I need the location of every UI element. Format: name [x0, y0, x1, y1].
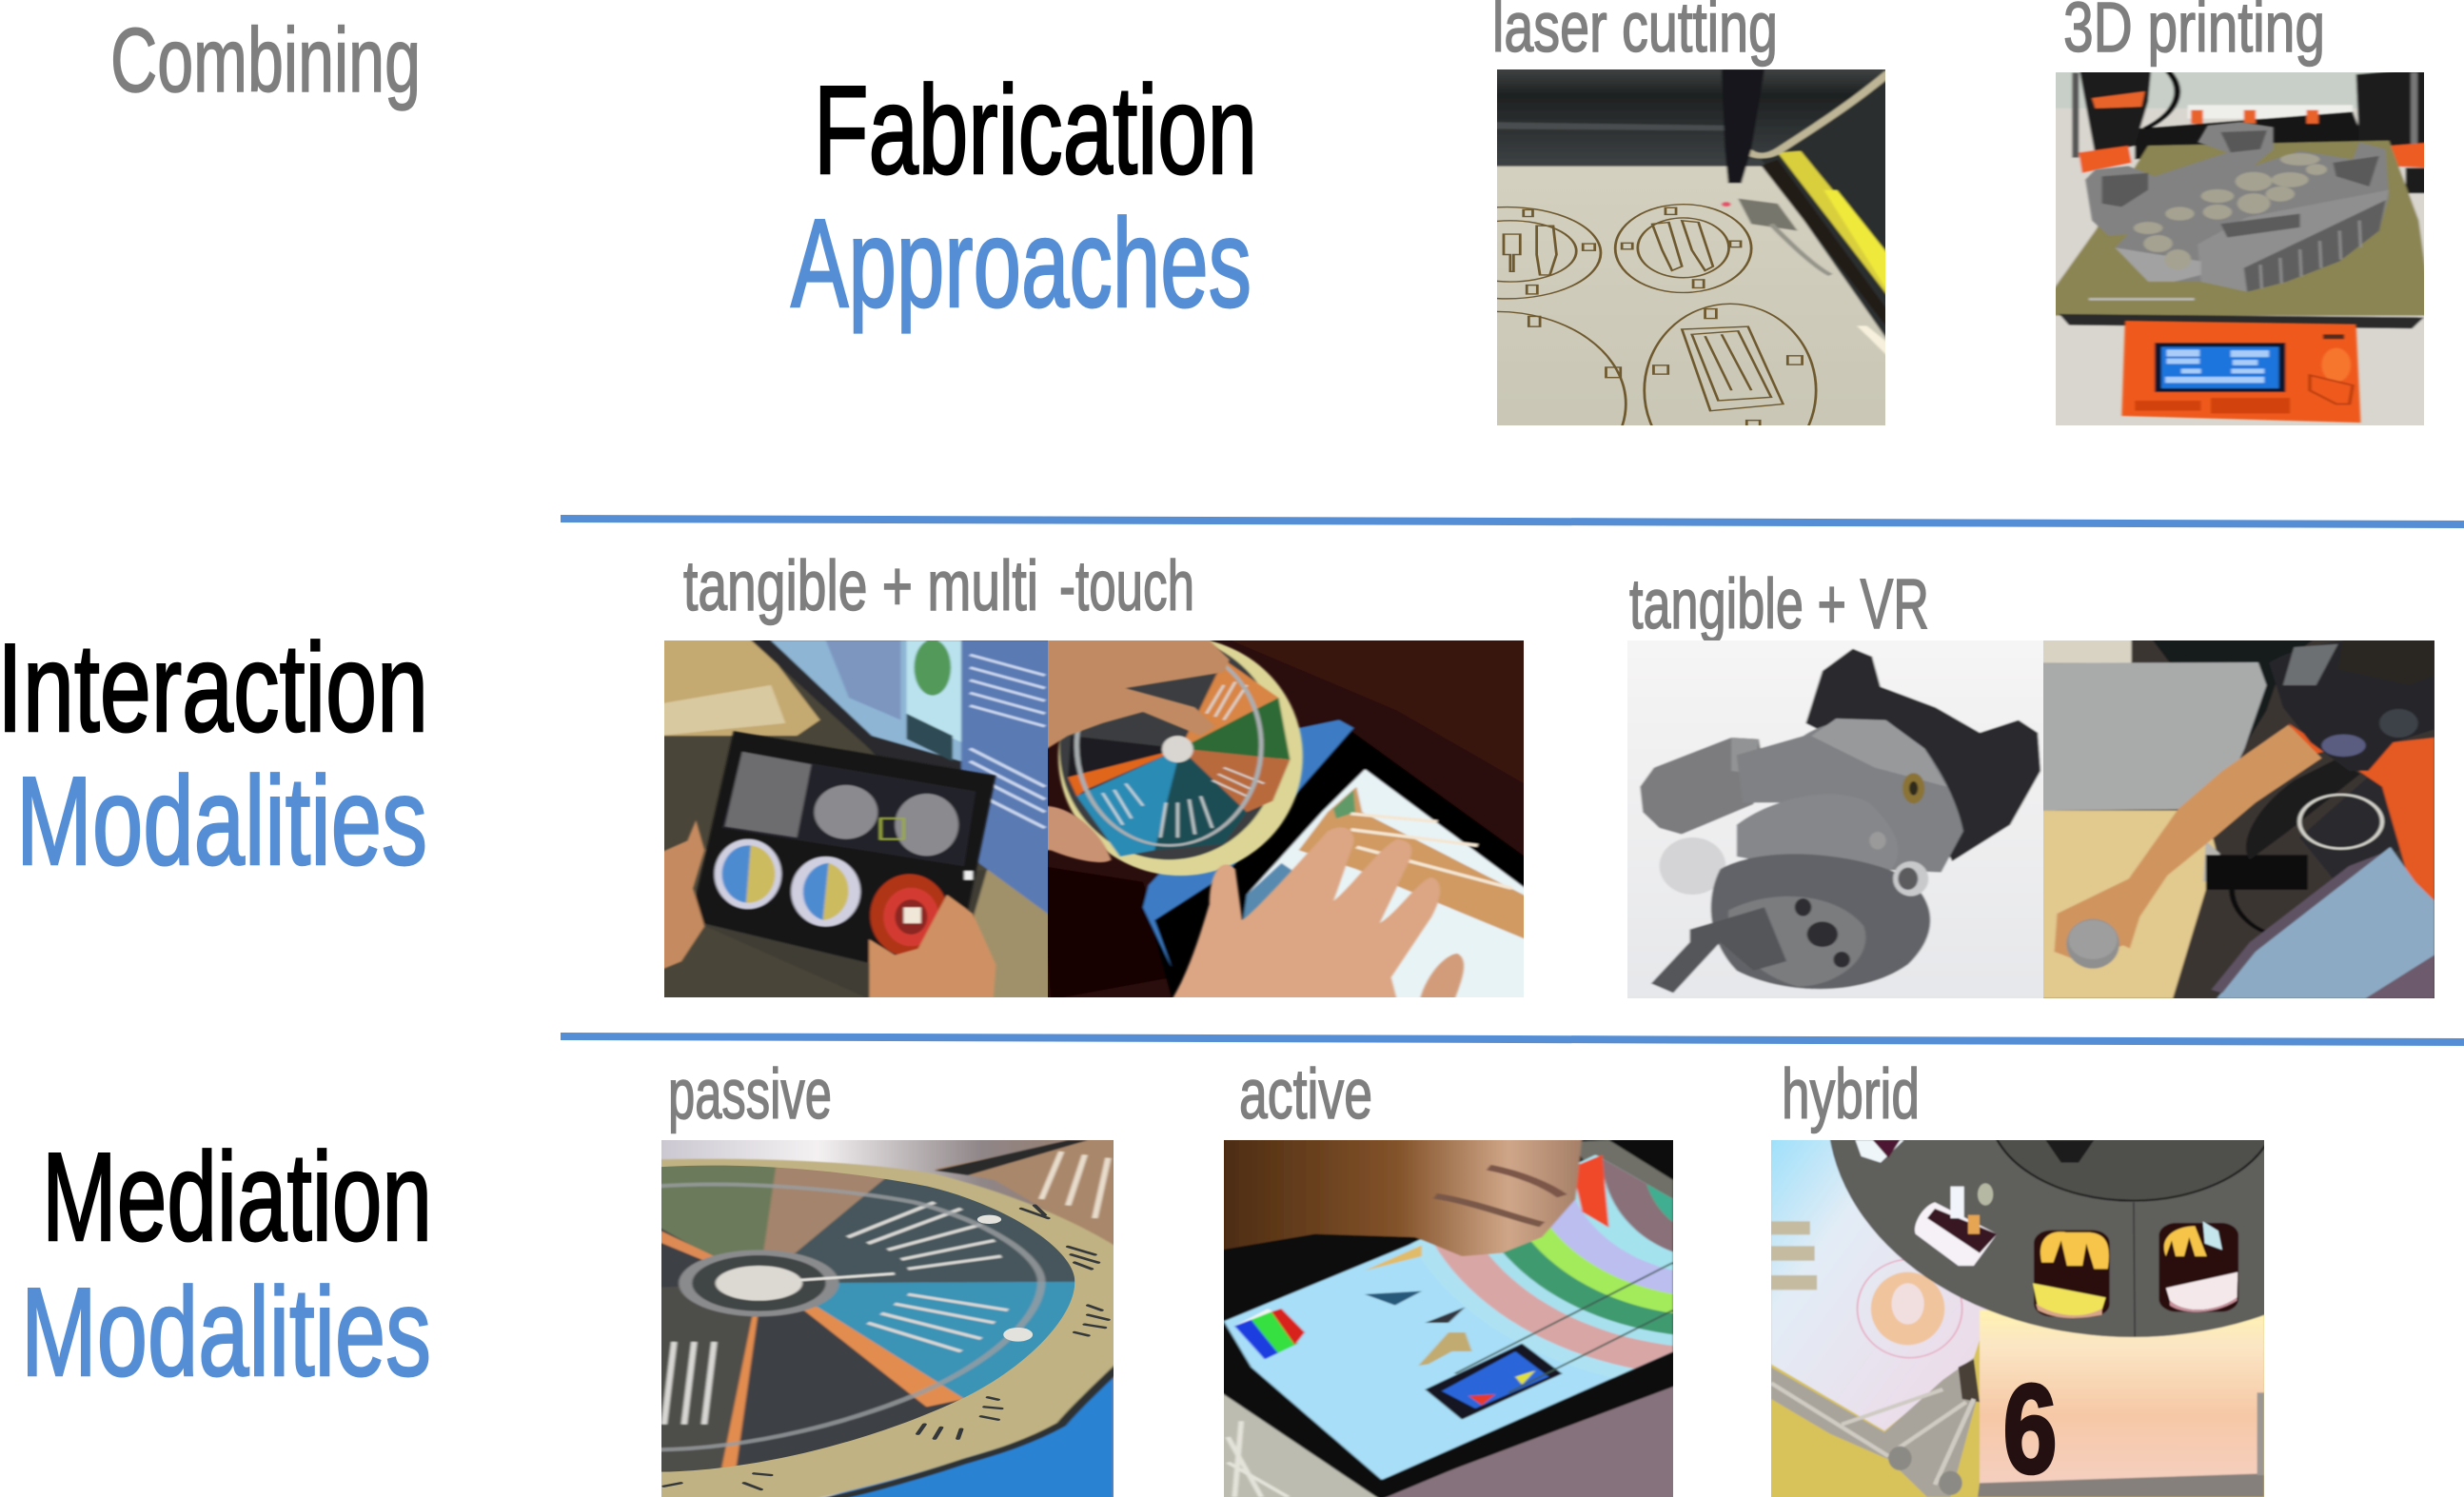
printed grey part [2085, 122, 2389, 292]
photo: 3D printer [2056, 72, 2424, 425]
label: tangible + multi-touch: -touch [1059, 546, 1194, 625]
rim [654, 1159, 1121, 1497]
heading: Interaction Modalities [0, 618, 428, 891]
digit on number panel: 6 [2003, 1358, 2058, 1497]
stand [1228, 1421, 1288, 1497]
arm [2055, 725, 2321, 961]
jeans [2217, 847, 2434, 998]
black tracker [1805, 649, 2040, 861]
photo: grey 3D-printed controller on tracker [1627, 640, 2043, 998]
base [1711, 854, 1930, 989]
grey rotating disc [1827, 883, 2438, 1337]
hands on disc and tablet [1042, 638, 1464, 999]
flexible hinge structure [1771, 1358, 1978, 1497]
blue base under disc [815, 1377, 1114, 1497]
knob [2066, 919, 2119, 969]
label: tangible + multi-touch: tangible + multi [683, 546, 1038, 625]
disc rim tick marks [664, 1206, 1108, 1489]
label: hybrid: hybrid [1782, 1054, 1920, 1133]
grey body [1737, 721, 1963, 873]
orange touch target [1858, 1259, 1962, 1358]
heading: Combining: Combining [110, 10, 421, 111]
divider line [561, 515, 2464, 528]
photo: laser cutter [1497, 69, 1885, 425]
photo: active tablet with hand [1224, 1140, 1673, 1497]
bezel [1221, 1140, 1683, 1497]
heading: Interaction Modalities: Interaction [0, 618, 428, 758]
photo: disc on tablet with hands [1048, 640, 1524, 997]
headset [2269, 640, 2434, 771]
number panel [1980, 1310, 2264, 1485]
heading: Mediation Modalities [21, 1127, 432, 1402]
photo: hybrid mechanical display [1771, 1140, 2264, 1497]
mirrored labels [1771, 1221, 1817, 1290]
bottom right surface [1378, 1373, 1683, 1497]
left hand [659, 820, 704, 971]
tablet body [659, 731, 995, 1003]
printer control unit [2121, 321, 2360, 423]
heading: Mediation Modalities: Modalities [21, 1262, 431, 1402]
hand [1214, 1135, 1582, 1256]
photo: tablet with tangible knob [664, 640, 1048, 997]
label: passive: passive [668, 1054, 832, 1133]
label: active: active [1239, 1054, 1372, 1133]
photo: passive printed disc [661, 1140, 1114, 1497]
ring [1737, 795, 1898, 876]
tablet [1149, 726, 1529, 999]
crank [1651, 907, 1786, 993]
orange shirt [2289, 723, 2434, 902]
heading: Fabrication Approaches: Approaches [791, 193, 1252, 333]
right hand [869, 895, 995, 1003]
photo: person in VR headset using tangible [2043, 640, 2434, 998]
heading: Fabrication Approaches: Fabrication [814, 60, 1257, 200]
heading: Fabrication Approaches [791, 60, 1257, 333]
handle [1640, 738, 1764, 835]
label: tangible + VR: tangible + VR [1629, 564, 1929, 643]
printed disc [1058, 638, 1303, 876]
divider line [561, 1033, 2464, 1046]
disc windows [1856, 1140, 1903, 1163]
heading: Interaction Modalities: Modalities [16, 751, 427, 891]
heading: Mediation Modalities: Mediation [42, 1127, 432, 1267]
chair arm [2299, 758, 2404, 885]
